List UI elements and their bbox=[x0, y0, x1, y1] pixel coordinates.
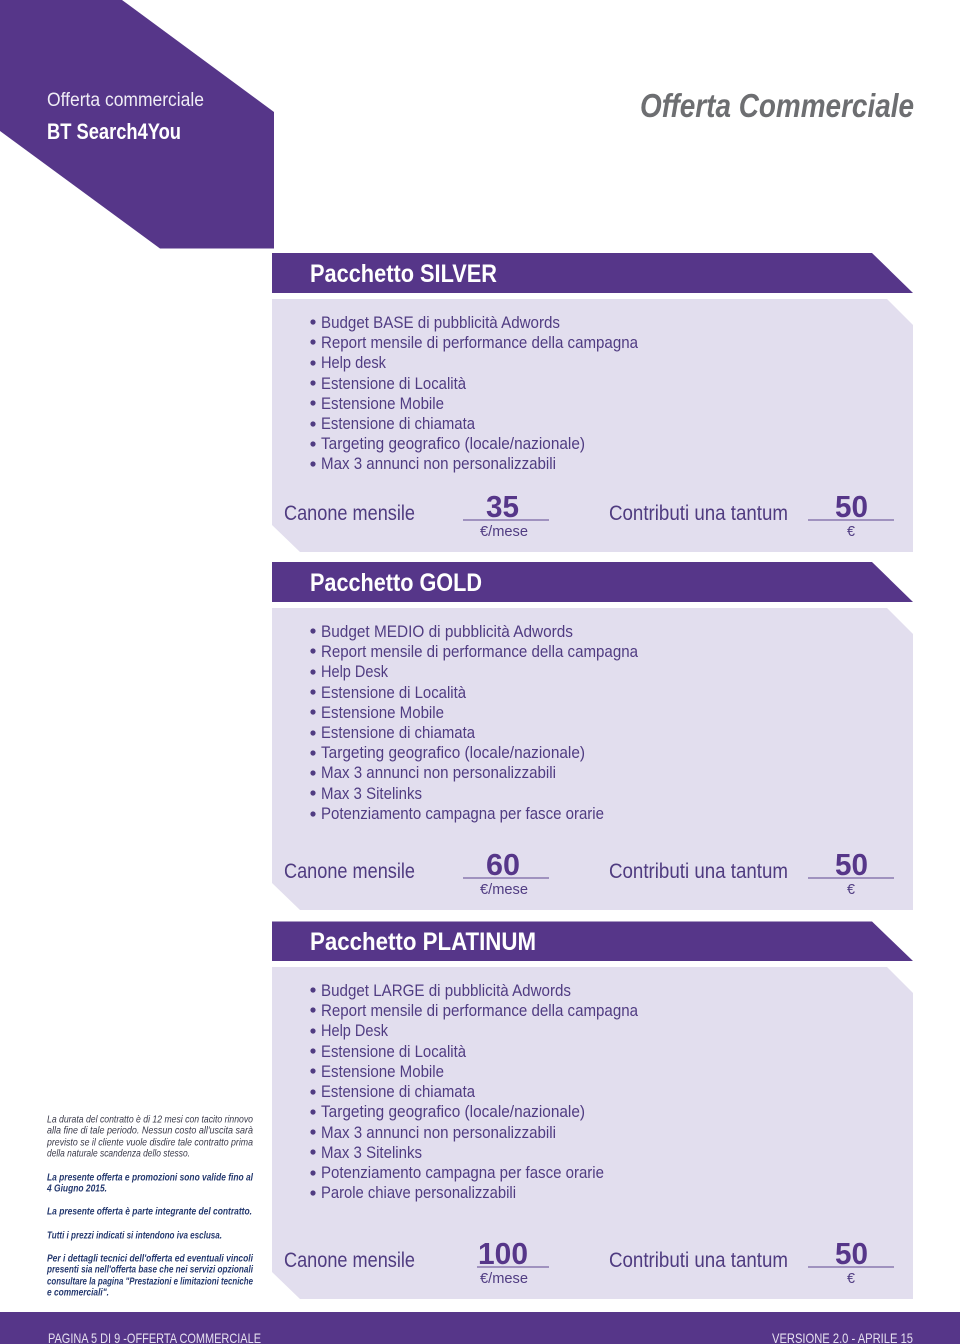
panel: Pacchetto SILVER bbox=[272, 253, 913, 552]
silver pricing: 35 bbox=[486, 489, 519, 524]
silver features list: Max 3 annunci non personalizzabili bbox=[321, 454, 556, 473]
platinum pricing: Canone mensile bbox=[284, 1249, 415, 1272]
gold pricing: 50 bbox=[835, 847, 868, 882]
header banner: BT Search4You bbox=[47, 119, 181, 144]
platinum heading bbox=[272, 922, 913, 961]
platinum features list: Max 3 Sitelinks bbox=[321, 1143, 422, 1162]
contract notes: La durata del contratto è di 12 mesi con tacito rinnovo bbox=[47, 1114, 253, 1125]
platinum pricing bbox=[284, 1236, 894, 1287]
contract notes: La presente offerta e promozioni sono valide fino al bbox=[47, 1172, 253, 1183]
platinum heading: Pacchetto PLATINUM bbox=[310, 928, 536, 956]
silver features list bbox=[310, 313, 638, 473]
platinum features list: Help Desk bbox=[321, 1021, 388, 1040]
silver pricing: Contributi una tantum bbox=[609, 502, 788, 525]
silver features list: Estensione di Località bbox=[321, 374, 466, 393]
gold features list: Potenziamento campagna per fasce orarie bbox=[321, 804, 604, 823]
silver heading bbox=[272, 253, 913, 293]
silver pricing: € bbox=[847, 523, 856, 540]
header banner bbox=[0, 0, 274, 248]
gold features list: Estensione di Località bbox=[321, 683, 466, 702]
contract notes: consultare la pagina "Prestazioni e limitazioni tecniche bbox=[47, 1276, 253, 1287]
platinum features list: Estensione Mobile bbox=[321, 1062, 444, 1081]
platinum pricing: €/mese bbox=[480, 1270, 528, 1287]
panel: Pacchetto GOLD bbox=[272, 562, 913, 910]
gold pricing: € bbox=[847, 881, 856, 898]
gold heading: Pacchetto GOLD bbox=[310, 569, 482, 597]
footer bar bbox=[0, 1312, 960, 1344]
platinum body bbox=[272, 967, 913, 1299]
gold pricing: Contributi una tantum bbox=[609, 860, 788, 883]
gold features list: Report mensile di performance della campagna bbox=[321, 642, 638, 661]
silver features list: Help desk bbox=[321, 353, 386, 372]
platinum pricing: 50 bbox=[835, 1236, 868, 1271]
header banner: Offerta commerciale bbox=[47, 90, 204, 111]
silver features list: Report mensile di performance della campagna bbox=[321, 333, 638, 352]
platinum features list: Report mensile di performance della campagna bbox=[321, 1001, 638, 1020]
gold features list: Help Desk bbox=[321, 662, 388, 681]
silver pricing bbox=[284, 489, 894, 540]
contract notes: Per i dettagli tecnici dell'offerta ed eventuali vincoli bbox=[47, 1253, 253, 1264]
contract notes: La presente offerta è parte integrante del contratto. bbox=[47, 1206, 252, 1217]
silver body bbox=[272, 299, 913, 552]
page title: Offerta Commerciale bbox=[640, 87, 914, 124]
platinum features list: Potenziamento campagna per fasce orarie bbox=[321, 1163, 604, 1182]
platinum features list: Targeting geografico (locale/nazionale) bbox=[321, 1102, 585, 1121]
contract notes: 4 Giugno 2015. bbox=[46, 1183, 107, 1194]
platinum features list: Budget LARGE di pubblicità Adwords bbox=[321, 981, 571, 1000]
gold features list: Targeting geografico (locale/nazionale) bbox=[321, 743, 585, 762]
silver pricing: Canone mensile bbox=[284, 502, 415, 525]
gold features list: Estensione Mobile bbox=[321, 703, 444, 722]
gold features list: Max 3 annunci non personalizzabili bbox=[321, 763, 556, 782]
gold features list: Budget MEDIO di pubblicità Adwords bbox=[321, 622, 573, 641]
silver heading: Pacchetto SILVER bbox=[310, 260, 497, 288]
silver pricing: €/mese bbox=[480, 523, 528, 540]
silver pricing: 50 bbox=[835, 489, 868, 524]
gold features list: Max 3 Sitelinks bbox=[321, 784, 422, 803]
platinum pricing: 100 bbox=[478, 1236, 528, 1271]
silver features list: Estensione di chiamata bbox=[321, 414, 475, 433]
contract notes: alla fine di tale periodo. Nessun costo all'uscita sarà bbox=[47, 1125, 253, 1136]
platinum features list: Estensione di chiamata bbox=[321, 1082, 475, 1101]
gold pricing bbox=[284, 847, 894, 898]
contract notes: e commerciali". bbox=[47, 1287, 109, 1298]
silver features list: Targeting geografico (locale/nazionale) bbox=[321, 434, 585, 453]
gold heading bbox=[272, 562, 913, 602]
platinum pricing: € bbox=[847, 1270, 856, 1287]
gold pricing: €/mese bbox=[480, 881, 528, 898]
platinum features list: Parole chiave personalizzabili bbox=[321, 1183, 516, 1202]
contract notes: della naturale scandenza dello stesso. bbox=[47, 1148, 190, 1159]
gold features list bbox=[310, 622, 638, 823]
silver features list: Budget BASE di pubblicità Adwords bbox=[321, 313, 560, 332]
gold features list: Estensione di chiamata bbox=[321, 723, 475, 742]
gold pricing: 60 bbox=[486, 847, 520, 882]
contract notes bbox=[46, 1114, 253, 1298]
contract notes: previsto se il cliente vuole disdire tale contratto prima bbox=[46, 1137, 253, 1148]
platinum features list bbox=[310, 981, 638, 1202]
contract notes: presenti sia nell'offerta base che nei servizi opzionali bbox=[46, 1264, 253, 1275]
panel: Pacchetto PLATINUM bbox=[272, 922, 913, 1299]
silver features list: Estensione Mobile bbox=[321, 394, 444, 413]
contract notes: Tutti i prezzi indicati si intendono iva esclusa. bbox=[47, 1230, 222, 1241]
platinum features list: Max 3 annunci non personalizzabili bbox=[321, 1123, 556, 1142]
gold pricing: Canone mensile bbox=[284, 860, 415, 883]
platinum pricing: Contributi una tantum bbox=[609, 1249, 788, 1272]
gold body bbox=[272, 608, 913, 910]
platinum features list: Estensione di Località bbox=[321, 1042, 466, 1061]
